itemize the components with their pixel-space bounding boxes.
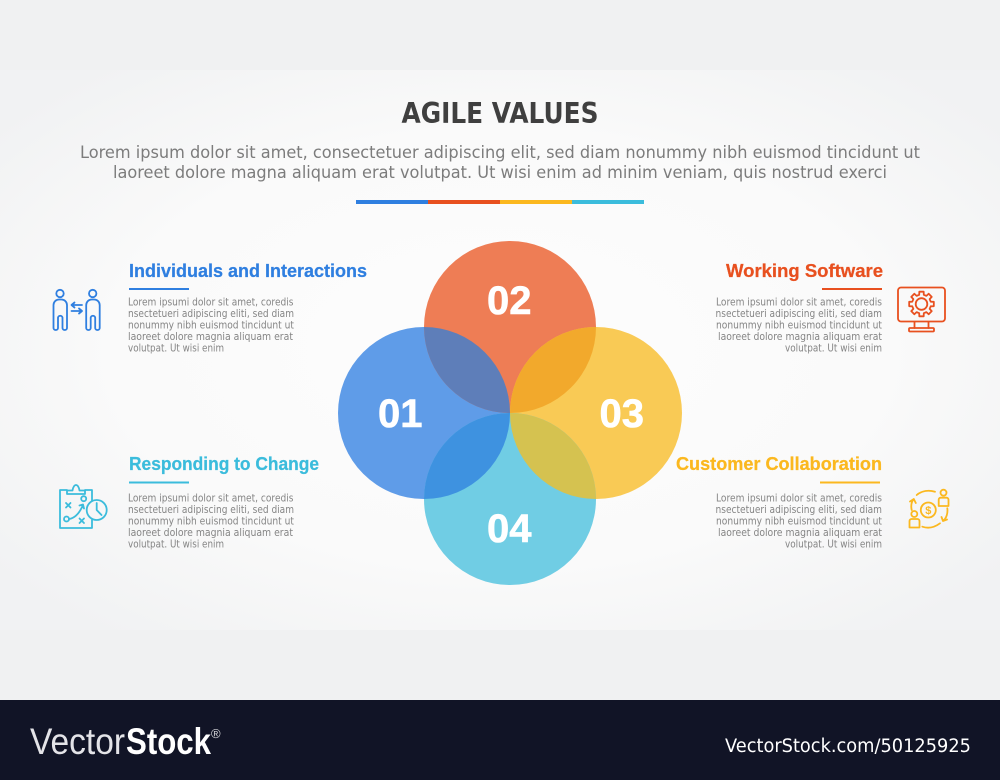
icon: people exchanging money bbox=[910, 490, 948, 528]
number 04: 04 bbox=[487, 507, 532, 551]
description: nsectetueri adipiscing eliti, sed diam bbox=[128, 309, 294, 320]
heading: Customer Collaboration bbox=[676, 453, 882, 474]
description: volutpat. Ut wisi enim bbox=[128, 344, 224, 354]
icon: people exchanging money: $ bbox=[925, 505, 931, 517]
number 01: 01 bbox=[378, 392, 422, 436]
icon: clipboard strategy with clock bbox=[60, 485, 107, 528]
description: nsectetueri adipiscing eliti, sed diam bbox=[716, 309, 882, 320]
number 03: 03 bbox=[600, 392, 644, 436]
description: nonummy nibh euismod tincidunt ut bbox=[716, 320, 882, 332]
image id: VectorStock.com/50125925 bbox=[725, 736, 971, 757]
heading underline bbox=[822, 288, 882, 290]
description: nsectetueri adipiscing eliti, sed diam bbox=[716, 505, 882, 516]
number 02: 02 bbox=[487, 279, 532, 323]
heading underline bbox=[129, 482, 189, 484]
description bbox=[128, 298, 294, 354]
description: laoreet dolore magnia aliquam erat bbox=[128, 332, 293, 343]
heading underline bbox=[129, 288, 189, 290]
description: nsectetueri adipiscing eliti, sed diam bbox=[128, 505, 294, 516]
description bbox=[716, 494, 882, 550]
circle 04 bbox=[424, 413, 596, 585]
description: laoreet dolore magnia aliquam erat bbox=[718, 528, 882, 539]
description: nonummy nibh euismod tincidunt ut bbox=[128, 516, 294, 528]
description: Lorem ipsumi dolor sit amet, coredis bbox=[716, 298, 882, 308]
subtitle text: Lorem ipsum dolor sit amet, consectetuer adipiscing elit, sed diam nonummy nibh euismod tincidunt ut bbox=[80, 143, 920, 162]
subtitle text bbox=[80, 143, 920, 182]
circle 01 bbox=[338, 327, 510, 499]
title: AGILE VALUES bbox=[402, 97, 598, 130]
icon: monitor with gear bbox=[898, 288, 945, 332]
description: laoreet dolore magnia aliquam erat bbox=[718, 332, 882, 343]
description bbox=[716, 298, 882, 354]
overlap 02 and 03 bbox=[510, 327, 596, 413]
venn diagram bbox=[338, 241, 682, 585]
panel: customer collaboration bbox=[676, 453, 948, 550]
central light panel bbox=[0, 70, 1000, 630]
overlap 01 and 02 bbox=[424, 327, 510, 413]
panel: responding to change bbox=[60, 453, 319, 550]
description: Lorem ipsumi dolor sit amet, coredis bbox=[716, 494, 882, 504]
overlap 03 and 04 bbox=[510, 413, 596, 499]
circle 02 bbox=[424, 241, 596, 413]
description: volutpat. Ut wisi enim bbox=[785, 344, 882, 354]
overlap 01 and 04 bbox=[424, 413, 510, 499]
brand logo: ® bbox=[211, 726, 221, 741]
heading: Working Software bbox=[726, 260, 883, 281]
heading: Responding to Change bbox=[129, 453, 319, 474]
brand logo: Stock bbox=[126, 721, 211, 762]
description: laoreet dolore magnia aliquam erat bbox=[128, 528, 293, 539]
circle 03 bbox=[510, 327, 682, 499]
description: nonummy nibh euismod tincidunt ut bbox=[716, 516, 882, 528]
description bbox=[128, 494, 294, 550]
four-colour title divider bbox=[356, 200, 644, 204]
footer bar bbox=[0, 700, 1000, 780]
subtitle text: laoreet dolore magna aliquam erat volutpat. Ut wisi enim ad minim veniam, quis nostrud exerci bbox=[113, 163, 887, 182]
brand logo: Vector bbox=[30, 721, 125, 762]
description: Lorem ipsumi dolor sit amet, coredis bbox=[128, 298, 294, 308]
heading underline bbox=[820, 482, 880, 484]
description: volutpat. Ut wisi enim bbox=[785, 540, 882, 550]
description: nonummy nibh euismod tincidunt ut bbox=[128, 320, 294, 332]
panel: working software bbox=[716, 260, 945, 354]
description: volutpat. Ut wisi enim bbox=[128, 540, 224, 550]
icon: two people exchanging bbox=[54, 290, 100, 330]
brand logo bbox=[30, 721, 221, 762]
description: Lorem ipsumi dolor sit amet, coredis bbox=[128, 494, 294, 504]
panel: individuals and interactions bbox=[54, 260, 367, 354]
heading: Individuals and Interactions bbox=[129, 260, 367, 281]
